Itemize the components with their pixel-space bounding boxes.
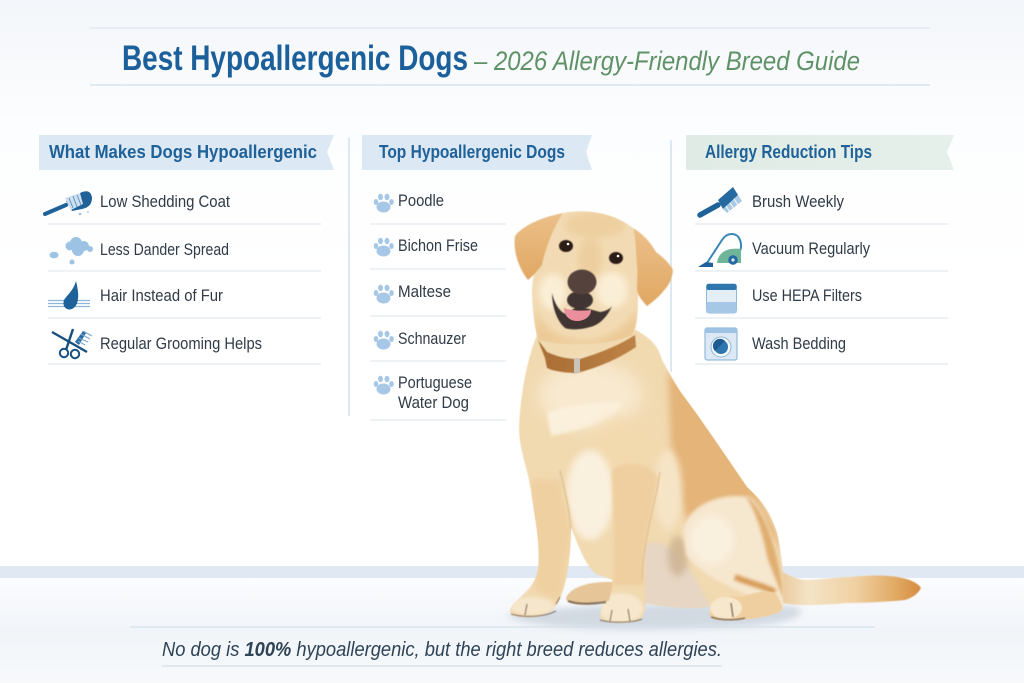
list item: low shedding coat: Low Shedding Coat xyxy=(100,192,230,211)
icon: HEPA filter xyxy=(706,284,736,313)
tail xyxy=(772,566,921,605)
list item: portuguese water dog: Water Dog xyxy=(398,393,469,412)
footer note: No dog is 100% hypoallergenic, but the right breed reduces allergies. xyxy=(162,639,722,661)
icon: paw xyxy=(374,285,394,304)
left leg shading xyxy=(530,480,572,600)
list item: poodle: Poodle xyxy=(398,191,444,210)
icon: paw xyxy=(374,376,394,394)
belly cream xyxy=(566,450,614,540)
centre front leg xyxy=(612,464,658,585)
heading banner: top hypoallergenic dogs: Top Hypoallergenic Dogs xyxy=(379,142,565,162)
title: Best Hypoallergenic Dogs xyxy=(122,39,468,78)
title: – 2026 Allergy-Friendly Breed Guide xyxy=(473,46,860,76)
panel: what makes dogs hypoallergenic xyxy=(39,135,334,364)
under-nose dark xyxy=(567,291,593,309)
heading banner: top hypoallergenic dogs xyxy=(362,135,592,170)
heading banner: allergy reduction tips xyxy=(686,135,954,170)
left ear xyxy=(515,213,563,280)
neck and head fur xyxy=(532,211,640,345)
floor shadow xyxy=(505,603,801,630)
list item: maltese: Maltese xyxy=(398,282,451,301)
heading banner: allergy reduction tips: Allergy Reduction Tips xyxy=(705,142,872,162)
nose xyxy=(568,270,596,294)
mouth xyxy=(552,293,612,329)
list item: bichon frise: Bichon Frise xyxy=(398,236,478,255)
hind thigh xyxy=(683,496,784,612)
list item: less dander spread: Less Dander Spread xyxy=(100,240,229,259)
icon: slicker brush xyxy=(45,191,92,215)
icon: paw xyxy=(374,331,394,350)
dog illustration xyxy=(510,211,921,623)
list item: wash bedding: Wash Bedding xyxy=(752,334,846,353)
panel: allergy reduction tips xyxy=(686,135,954,364)
hind paw xyxy=(708,591,784,622)
list item: regular grooming helps: Regular Grooming Helps xyxy=(100,334,262,353)
body silhouette with shading xyxy=(510,330,790,623)
list item: use hepa filters: Use HEPA Filters xyxy=(752,286,862,305)
list item: portuguese water dog: Portuguese xyxy=(398,373,472,392)
heading banner: what makes dogs hypoallergenic xyxy=(39,135,334,170)
back tan shading xyxy=(668,370,790,560)
collar xyxy=(538,335,636,373)
icon: brush xyxy=(700,187,742,215)
icon: vacuum cleaner xyxy=(698,234,741,267)
panel: top hypoallergenic dogs xyxy=(362,135,592,420)
tongue xyxy=(564,308,591,321)
icon: dander cloud xyxy=(50,237,93,264)
icon: scissors and comb xyxy=(52,329,92,358)
chest cream xyxy=(538,361,642,429)
icon: hair strand xyxy=(48,281,90,309)
list item: portuguese water dog xyxy=(398,373,472,412)
heading banner: what makes dogs hypoallergenic: What Makes Dogs Hypoallergenic xyxy=(49,142,317,162)
floor xyxy=(0,566,1024,683)
list item: brush weekly: Brush Weekly xyxy=(752,192,844,211)
list item: schnauzer: Schnauzer xyxy=(398,329,466,348)
title xyxy=(90,28,930,85)
icon: washing machine xyxy=(705,328,737,360)
back paw xyxy=(566,582,613,604)
right ear xyxy=(633,228,673,306)
eyes xyxy=(559,240,623,264)
list item: vacuum regularly: Vacuum Regularly xyxy=(752,239,870,258)
paw toe marks xyxy=(511,597,745,622)
icon: paw xyxy=(374,238,394,256)
list item: hair instead of fur: Hair Instead of Fur xyxy=(100,286,223,305)
belly between legs xyxy=(645,543,712,610)
icon: paw xyxy=(374,194,394,212)
